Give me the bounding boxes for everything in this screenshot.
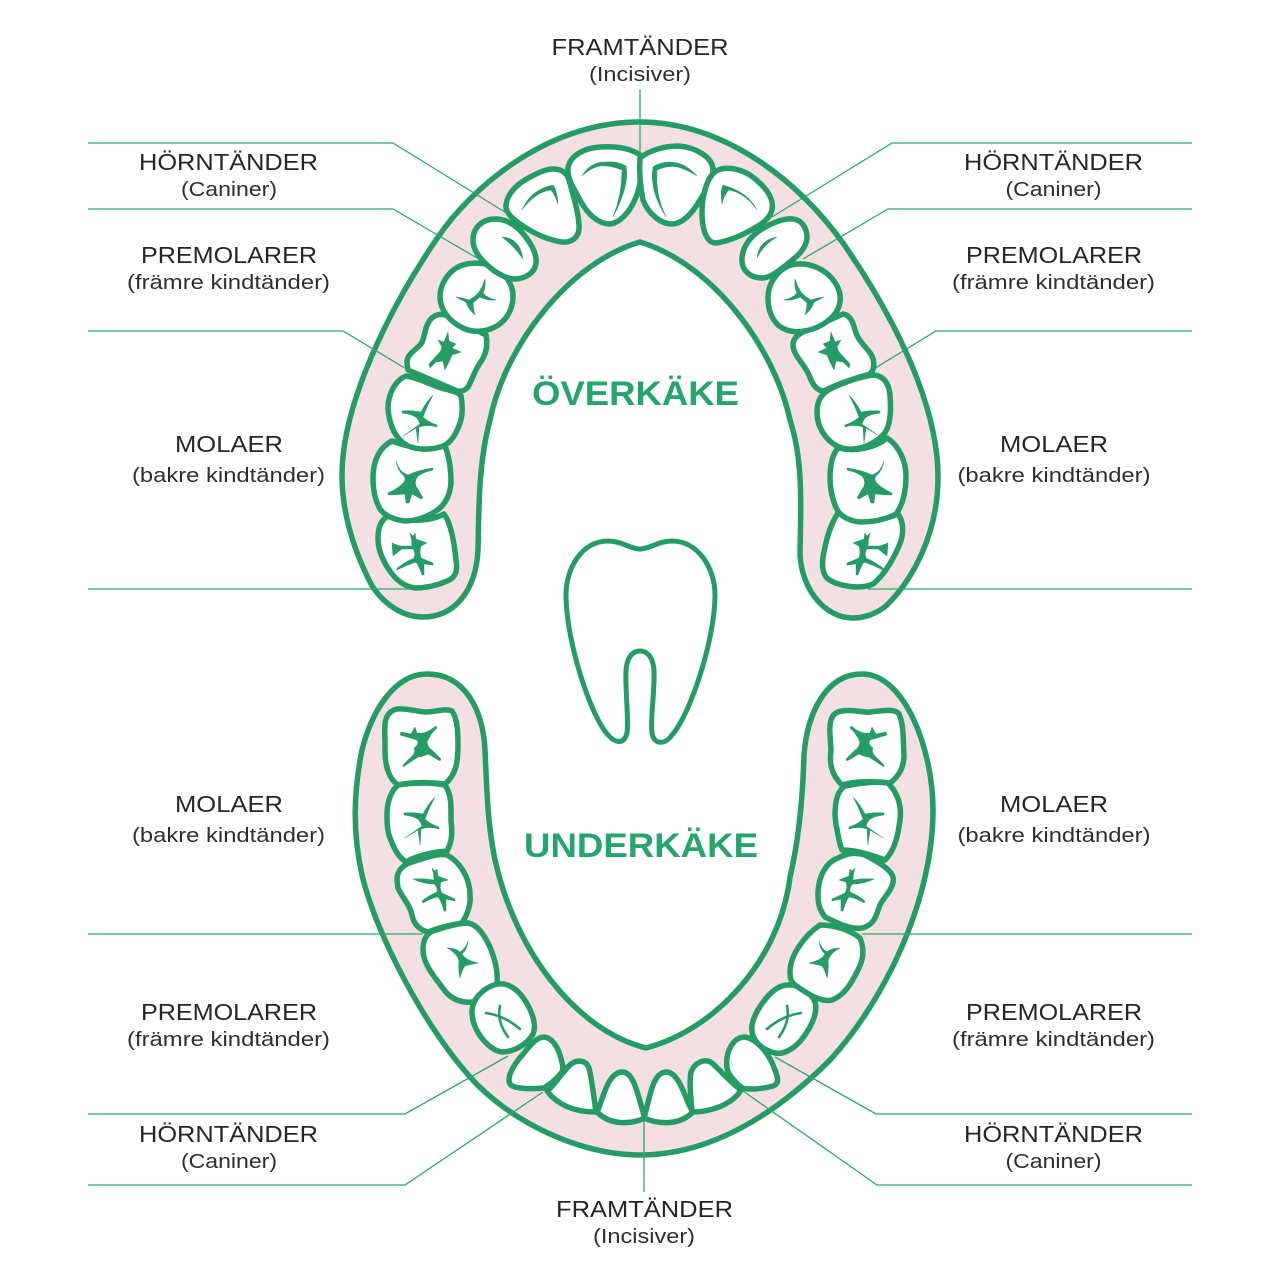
tooth: lower right canine (727, 1037, 778, 1089)
label: upper left molars: MOLAER (175, 431, 283, 457)
tooth: upper right molar 3 (823, 513, 903, 587)
label: lower left canines: HÖRNTÄNDER (139, 1121, 318, 1147)
label: bottom incisors: (Incisiver) (593, 1226, 695, 1248)
label: upper right premolars: (främre kindtänder) (952, 272, 1155, 294)
tooth: lower right central incisor (644, 1072, 693, 1123)
lower teeth (385, 709, 904, 1123)
label: lower right molars: (bakre kindtänder) (958, 825, 1150, 847)
label: lower right premolars: (främre kindtänder) (952, 1029, 1155, 1051)
tooth: lower right premolar 1 (752, 985, 816, 1053)
tooth: lower left premolar 1 (472, 984, 534, 1052)
label: lower right premolars (952, 999, 1155, 1051)
tooth: upper left incisor (568, 147, 641, 224)
icon: centre molar tooth (566, 541, 715, 742)
label: upper left canines: HÖRNTÄNDER (139, 149, 318, 175)
label: upper left canines: (Caniner) (181, 179, 277, 201)
label: upper left canines (139, 149, 318, 201)
tooth: lower left central incisor (597, 1072, 645, 1123)
upper jaw gum arch (342, 122, 938, 618)
tooth: upper left canine small (473, 219, 536, 279)
tooth: upper left molar 1 (388, 376, 462, 449)
tooth: upper left molar 2 (373, 441, 451, 521)
tooth: upper right molar 2 (830, 438, 906, 522)
label: upper right canines (964, 149, 1143, 201)
heading: lower jaw: UNDERKÄKE (524, 827, 758, 865)
upper teeth (373, 146, 906, 588)
label: upper left premolars: (främre kindtänder) (127, 272, 330, 294)
label: upper right canines: (Caniner) (1006, 179, 1102, 201)
tooth: upper left premolar 2 (407, 314, 487, 391)
tooth: upper right incisor (640, 146, 713, 224)
label: lower left premolars: (främre kindtänder) (127, 1029, 330, 1051)
tooth: upper right premolar 2 (793, 314, 874, 391)
label: upper right molars: (bakre kindtänder) (958, 465, 1150, 487)
tooth: lower right premolar 2 (790, 925, 863, 1001)
label: upper left molars: (bakre kindtänder) (132, 465, 325, 487)
tooth: lower left molar 2 (387, 783, 452, 862)
label: upper left molars (132, 431, 325, 487)
label: lower left premolars: PREMOLARER (141, 999, 317, 1025)
label: lower left premolars (127, 999, 330, 1051)
tooth: upper left canine (506, 169, 579, 242)
label: lower left molars (132, 791, 325, 847)
tooth: upper left molar 3 (378, 514, 457, 588)
lower jaw gum arch (355, 674, 933, 1155)
label: top incisors: (Incisiver) (589, 64, 691, 86)
label: lower right molars (958, 791, 1150, 847)
tooth: upper left premolar 1 (440, 263, 513, 331)
tooth: upper right molar 1 (817, 375, 890, 449)
label: top incisors: FRAMTÄNDER (552, 34, 728, 60)
label: lower right molars: MOLAER (1000, 791, 1108, 817)
label: bottom incisors (556, 1196, 733, 1248)
label: lower left canines (139, 1121, 318, 1173)
label: upper right premolars (952, 242, 1155, 294)
label: lower right canines: (Caniner) (1006, 1151, 1102, 1173)
label: top incisors (552, 34, 728, 86)
label: lower left molars: (bakre kindtänder) (132, 825, 325, 847)
tooth: lower left molar 3 (385, 709, 458, 785)
label: upper right canines: HÖRNTÄNDER (964, 149, 1143, 175)
tooth: lower left molar 1 (397, 855, 470, 932)
leader lines (88, 89, 1192, 1192)
label: lower right premolars: PREMOLARER (966, 999, 1142, 1025)
label: upper left premolars (127, 242, 330, 294)
tooth: lower left premolar 2 (423, 923, 497, 1002)
label: lower left molars: MOLAER (175, 791, 283, 817)
tooth: lower left canine (509, 1037, 563, 1089)
tooth: lower right lateral incisor (690, 1061, 741, 1112)
label: lower right canines (964, 1121, 1143, 1173)
tooth: lower right molar 1 (818, 853, 893, 928)
label: upper right molars (958, 431, 1150, 487)
label: upper right premolars: PREMOLARER (966, 242, 1142, 268)
label: upper right molars: MOLAER (1000, 431, 1108, 457)
label: upper left premolars: PREMOLARER (141, 242, 317, 268)
tooth: lower left lateral incisor (547, 1061, 596, 1112)
tooth: lower right molar 3 (830, 710, 904, 785)
label: bottom incisors: FRAMTÄNDER (556, 1196, 733, 1222)
label: lower right canines: HÖRNTÄNDER (964, 1121, 1143, 1147)
heading: upper jaw: ÖVERKÄKE (532, 375, 739, 413)
tooth: upper right canine small (742, 219, 807, 278)
tooth: upper right premolar 1 (768, 264, 840, 332)
tooth: upper right canine (702, 168, 772, 243)
tooth: lower right molar 2 (835, 782, 900, 860)
label: lower left canines: (Caniner) (181, 1151, 277, 1173)
